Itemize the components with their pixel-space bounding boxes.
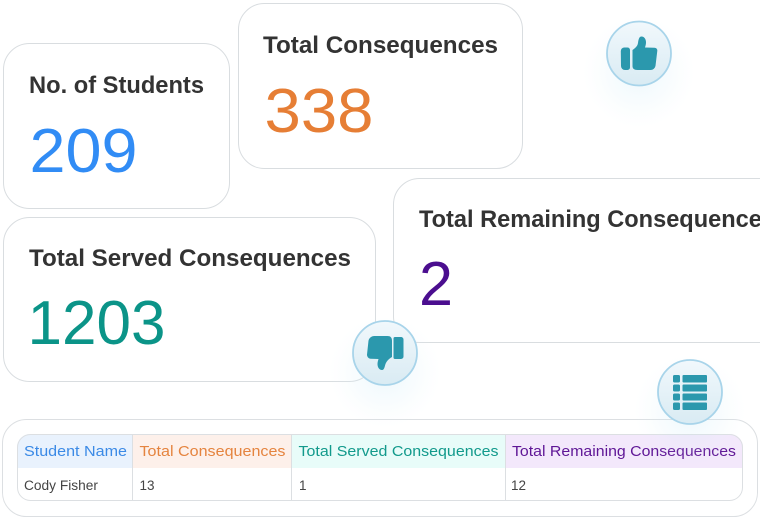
header: total served consequences: Total Served Consequences (298, 444, 498, 460)
table grid (18, 434, 742, 500)
cell: 13: 13 (140, 478, 155, 493)
icon: table list (634, 355, 746, 467)
cell: 12: 12 (511, 478, 526, 493)
value: 338: 338 (264, 77, 374, 146)
header: total remaining consequences: Total Remaining Consequences (512, 444, 736, 460)
header: student name: Student Name (24, 444, 127, 460)
table header backgrounds (17, 434, 743, 468)
heading: no. of students: No. of Students (29, 72, 204, 99)
cell: cody fisher: Cody Fisher (24, 478, 99, 493)
panel: student table (2, 420, 758, 516)
icon: thumbs up (583, 16, 695, 128)
value: 209: 209 (30, 117, 138, 186)
value: 2: 2 (419, 250, 453, 319)
heading: total served consequences: Total Served Consequences (29, 245, 351, 272)
card: no. of students (4, 44, 230, 208)
card: total served consequences (4, 218, 376, 382)
heading: total consequences: Total Consequences (263, 32, 498, 59)
value: 1203: 1203 (28, 289, 166, 358)
card: total consequences (238, 4, 522, 168)
card: total remaining consequences (394, 178, 760, 342)
icon: thumbs down (329, 316, 441, 428)
cell: 1: 1 (299, 478, 307, 493)
header: total consequences: Total Consequences (140, 444, 286, 460)
